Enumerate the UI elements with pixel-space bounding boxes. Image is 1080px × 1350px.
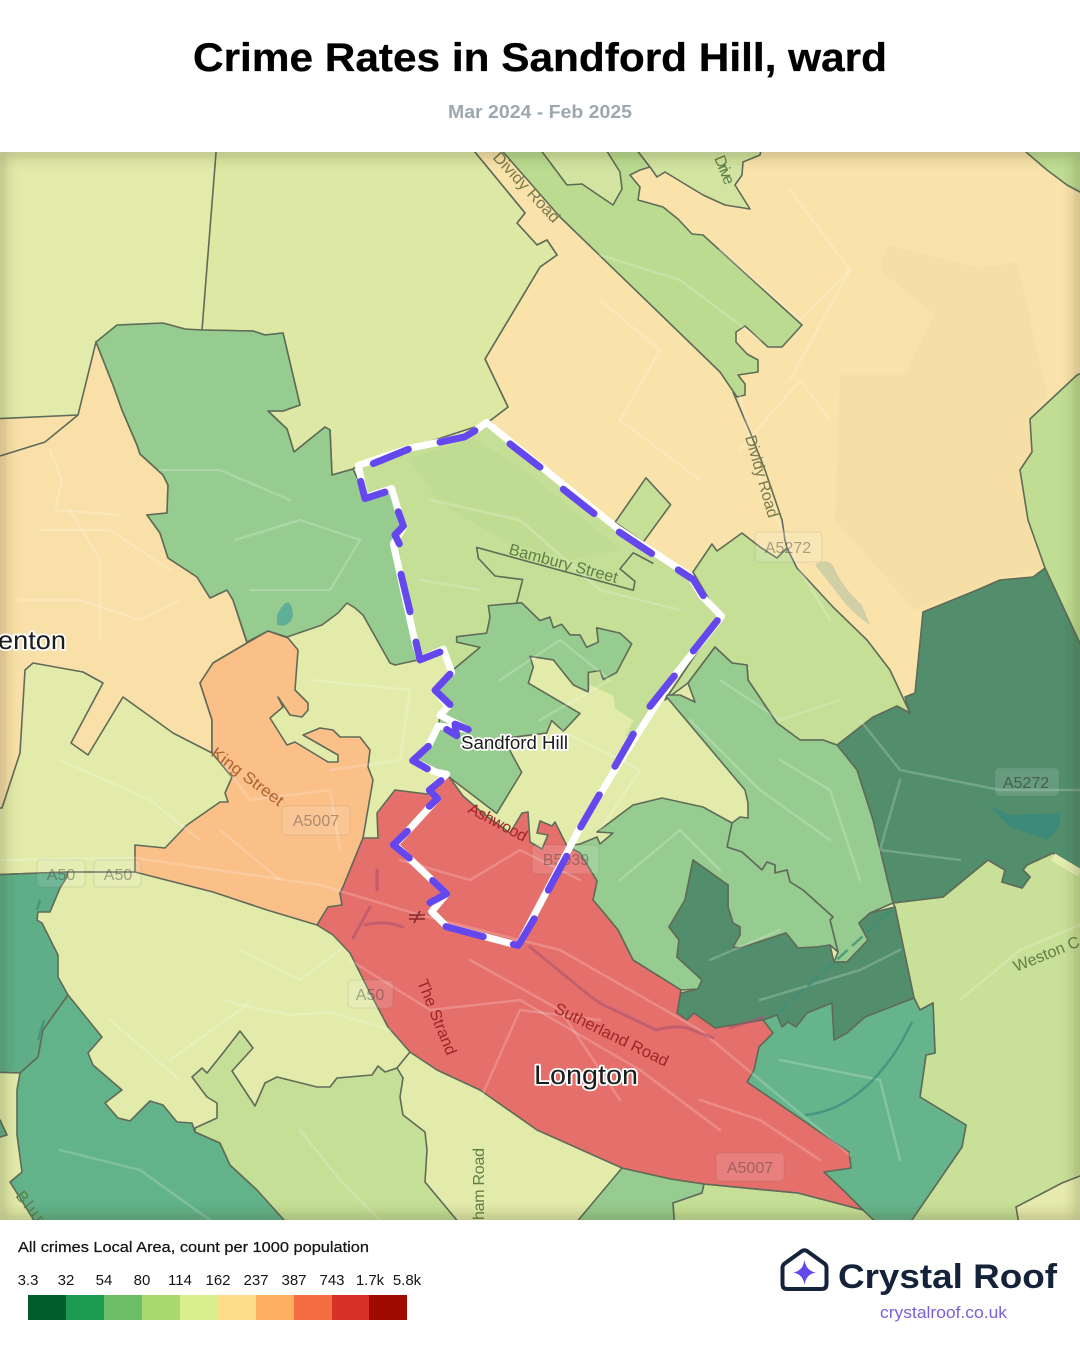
title: Crime Rates in Sandford Hill, ward	[193, 36, 887, 80]
area: far south east corner	[1015, 1175, 1080, 1220]
area: light green south	[192, 1031, 465, 1230]
small green block	[615, 478, 671, 542]
area: tan shaded patch	[835, 245, 1047, 610]
logo url: crystalroof.co.uk	[880, 1304, 1008, 1322]
icon: house outline	[782, 1250, 826, 1289]
legend title: All crimes Local Area, count per 1000 population	[18, 1239, 369, 1256]
area: medium green south of ward	[567, 798, 838, 990]
legend scale labels: 80	[134, 1272, 150, 1289]
logo: Crystal Roof	[782, 1250, 1058, 1322]
road shields: A50	[356, 987, 384, 1004]
icon: purple star	[793, 1260, 816, 1285]
ward boundary: white base	[358, 422, 722, 946]
area: light green south centre	[672, 1184, 872, 1220]
light road: east	[1053, 857, 1080, 873]
subtitle: date range: Mar 2024 - Feb 2025	[448, 102, 632, 122]
road labels: Ashwood	[465, 801, 530, 846]
area: orange King Street	[135, 631, 373, 925]
road labels: Dividy Road	[741, 433, 781, 520]
south line	[397, 1052, 410, 1068]
legend scale labels	[18, 1272, 422, 1289]
tan west inner boundary	[0, 415, 78, 456]
logo wordmark: Crystal Roof	[838, 1258, 1058, 1296]
road labels: Dividy Road	[489, 149, 563, 227]
area: western boundary line along the A50	[0, 872, 135, 875]
area: small green far left	[0, 1120, 7, 1140]
road shields: A50	[104, 867, 132, 884]
road shields: A5272	[765, 540, 811, 557]
area: light green east of ward	[665, 533, 910, 745]
area: green strip north	[497, 145, 802, 397]
area: dark green north east	[837, 568, 1080, 903]
Dividy Road boundary line	[733, 392, 787, 548]
place label: Sandford Hill: Sandford Hill	[461, 733, 568, 753]
area: top centre	[202, 140, 557, 475]
station symbol	[409, 911, 425, 923]
road labels: King Street	[208, 745, 287, 810]
area: green south west upper	[0, 872, 68, 1073]
water: pond east	[988, 805, 1060, 840]
area: tan west	[0, 342, 247, 808]
legend scale labels: 3.3	[18, 1272, 38, 1289]
road labels: Bambury Street	[507, 541, 620, 587]
streets	[0, 190, 1080, 1220]
legend scale labels: 387	[281, 1272, 307, 1289]
legend	[18, 1239, 422, 1320]
road shields: A5007	[727, 1160, 773, 1177]
Bambury Street boundary	[477, 547, 653, 603]
rail lines in Longton	[353, 870, 763, 1038]
river and rail through green areas	[37, 900, 912, 1115]
water: ponds north east	[815, 561, 870, 625]
road labels: ham Road	[471, 1148, 488, 1220]
road shields: A5007	[293, 813, 339, 830]
road shields: B5039	[543, 852, 589, 869]
legend scale labels: 32	[58, 1272, 74, 1289]
road shields	[37, 532, 1059, 1181]
area: tan north east	[465, 140, 1080, 720]
area: medium green south centre	[578, 1168, 703, 1220]
water: west pond in green	[277, 602, 293, 626]
area: top right corner	[1024, 152, 1080, 193]
road shields: A50	[47, 867, 75, 884]
area: east green strip	[1020, 370, 1080, 665]
darker northern slope	[408, 439, 620, 560]
area: tan top fragment	[410, 145, 463, 166]
ward boundary: purple dashes	[361, 431, 717, 946]
area: pale green north pocket	[541, 152, 623, 206]
legend scale labels: 5.8k	[393, 1272, 422, 1289]
area: light green south east	[893, 853, 1080, 1230]
legend scale labels: 237	[243, 1272, 269, 1289]
place label: Longton: Longton	[534, 1060, 638, 1090]
legend scale labels: 1.7k	[356, 1272, 385, 1289]
edge shading	[0, 150, 1080, 1222]
legend scale labels: 743	[319, 1272, 345, 1289]
area: green south west lower	[10, 995, 297, 1230]
road labels: The Strand	[413, 977, 459, 1058]
area: darkest green centre	[669, 860, 914, 1040]
road shields: A5272	[1003, 775, 1049, 792]
road labels: Blur	[12, 1188, 48, 1227]
road labels	[12, 149, 1080, 1227]
area: pale green north east pocket	[638, 152, 762, 210]
ward central green area	[412, 603, 632, 813]
legend scale labels: 114	[168, 1272, 192, 1289]
area: teal green south east	[747, 998, 966, 1230]
legend colour bar	[28, 1295, 407, 1320]
area: Sandford Hill ward	[358, 422, 722, 813]
road labels: Sutherland Road	[551, 1000, 671, 1070]
area: medium green east	[665, 647, 893, 962]
legend scale labels: 54	[96, 1272, 112, 1289]
area: red Longton	[317, 774, 863, 1210]
road labels: Drive	[710, 153, 737, 187]
legend scale labels: 162	[205, 1272, 231, 1289]
area: green north west	[96, 323, 418, 665]
